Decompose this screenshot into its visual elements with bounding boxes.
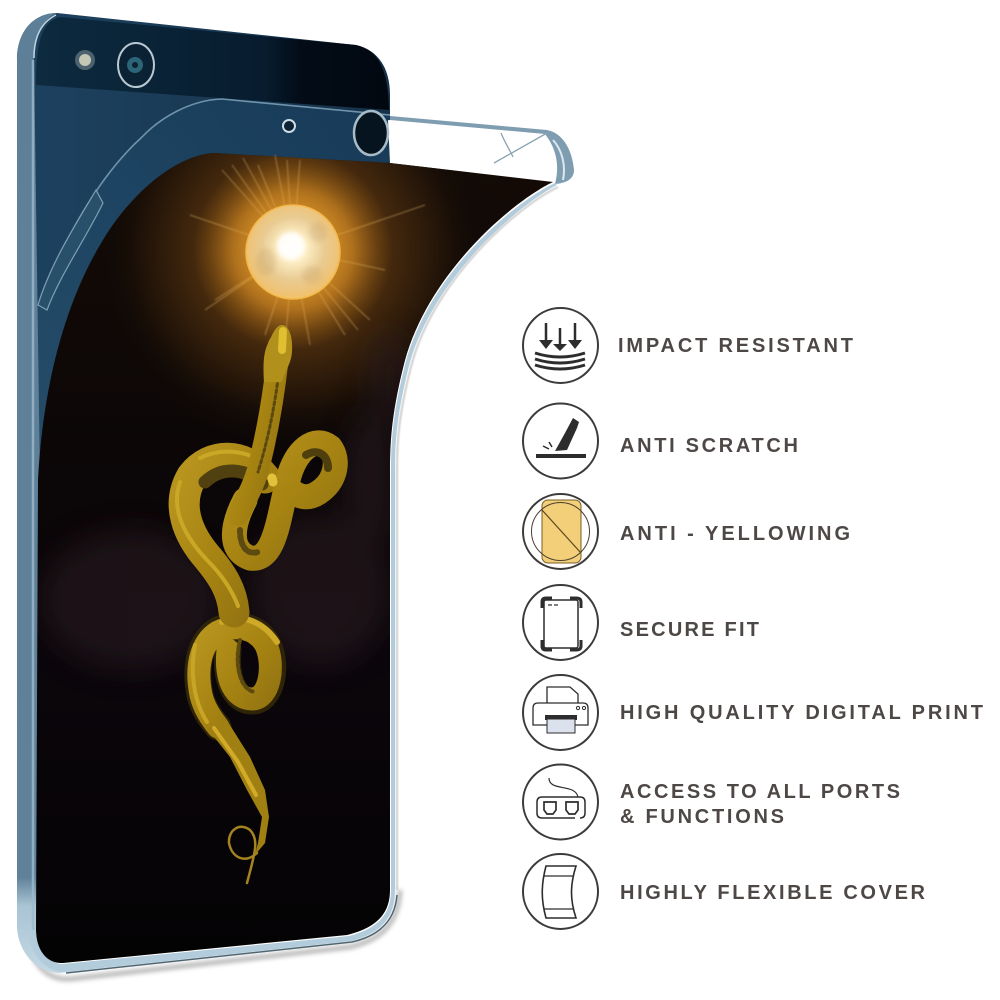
- phone mockup: [17, 13, 574, 979]
- moon: [233, 190, 353, 310]
- icon: scratch: [523, 404, 598, 478]
- case side button: [38, 190, 103, 310]
- case top band: [34, 99, 390, 500]
- lower coil: [198, 626, 273, 727]
- case port hole: [283, 120, 295, 132]
- tail loop: [229, 827, 257, 883]
- neck: [238, 345, 279, 515]
- feature: impact resistant: [523, 308, 853, 383]
- phone and case left strip: [17, 13, 200, 973]
- icon: yellowing: [523, 494, 598, 569]
- clouds: [40, 330, 410, 670]
- case drop shadow: [30, 890, 400, 979]
- icon: impact: [523, 308, 598, 383]
- label: IMPACT RESISTANT: [618, 335, 853, 357]
- icon: printer: [523, 675, 598, 750]
- label: & FUNCTIONS: [620, 806, 784, 828]
- feature: flexible cover: [523, 854, 926, 929]
- phone back: [17, 13, 390, 700]
- case corner rim: [390, 116, 574, 184]
- feature: ports: [523, 764, 900, 840]
- right loop: [234, 443, 335, 558]
- label: ANTI - YELLOWING: [620, 523, 850, 545]
- case camera ring: [354, 111, 388, 155]
- case right edge and bottom rim: [28, 183, 557, 972]
- sun rays: [190, 155, 425, 345]
- feature: secure fit: [523, 585, 759, 660]
- feature: anti yellowing: [523, 494, 850, 569]
- label: HIGH QUALITY DIGITAL PRINT: [620, 702, 983, 724]
- feature: digital print: [523, 675, 983, 750]
- label: ACCESS TO ALL PORTS: [620, 781, 900, 803]
- label: ANTI SCRATCH: [620, 435, 798, 457]
- icon: ports: [523, 764, 598, 840]
- label: SECURE FIT: [620, 619, 759, 641]
- flash: [75, 50, 95, 70]
- icon: flexible: [523, 854, 598, 929]
- snake: [177, 325, 335, 883]
- label: HIGHLY FLEXIBLE COVER: [620, 882, 926, 904]
- camera lens: [118, 43, 154, 87]
- artwork panel: [30, 140, 560, 963]
- feature: anti scratch: [523, 404, 798, 478]
- label: [620, 781, 900, 828]
- icon: secure fit: [523, 585, 598, 660]
- tail taper: [207, 722, 269, 855]
- head: [264, 325, 292, 382]
- left loop: [184, 458, 265, 612]
- case cut-out opening: [388, 120, 556, 178]
